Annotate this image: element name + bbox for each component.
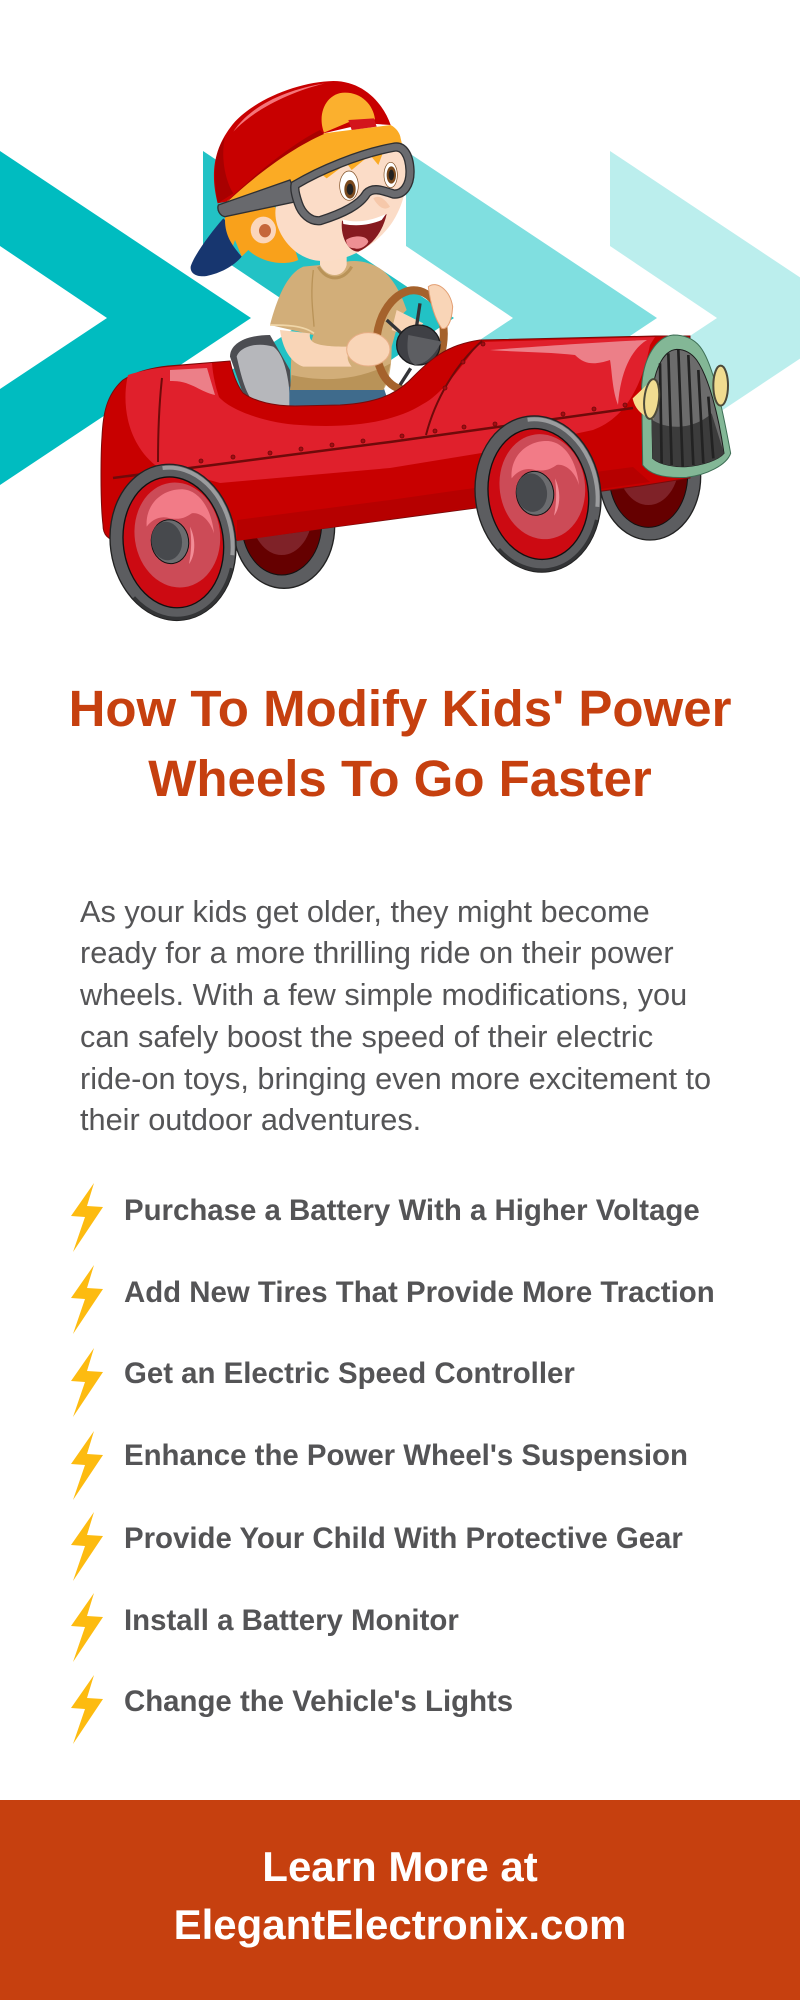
- front wheel: [465, 408, 611, 580]
- footer call to action: [0, 1800, 800, 2000]
- icon: lightning bolt 1: [71, 1183, 103, 1252]
- title: [69, 680, 731, 807]
- intro paragraph: their outdoor adventures.: [80, 1102, 421, 1137]
- icon: lightning bolt 2: [71, 1265, 103, 1334]
- rear wheels: [233, 413, 701, 588]
- boy torso, seat and steering wheel: [230, 257, 453, 407]
- tip 7: Change the Vehicle's Lights: [124, 1685, 513, 1718]
- icon: lightning bolt 7: [71, 1675, 103, 1744]
- footer call to action: Learn More at: [262, 1843, 538, 1890]
- intro paragraph: can safely boost the speed of their electric: [80, 1019, 653, 1054]
- icon: lightning bolt 6: [71, 1593, 103, 1662]
- tip 2: Add New Tires That Provide More Traction: [124, 1276, 715, 1309]
- icon: lightning bolt 4: [71, 1431, 103, 1500]
- tip 6: Install a Battery Monitor: [124, 1604, 459, 1637]
- tip 1: Purchase a Battery With a Higher Voltage: [124, 1194, 700, 1227]
- rear-left front wheel: [100, 456, 246, 629]
- chevron arrows background: [0, 151, 800, 485]
- boy head with cap and goggles: [191, 81, 410, 276]
- intro paragraph: ready for a more thrilling ride on their power: [80, 935, 674, 970]
- title: How To Modify Kids' Power: [69, 680, 731, 737]
- icon: lightning bolt 3: [71, 1348, 103, 1417]
- intro paragraph: wheels. With a few simple modifications, you: [80, 977, 687, 1012]
- icon: lightning bolt 5: [71, 1512, 103, 1581]
- grille and headlights: [633, 335, 731, 478]
- title: Wheels To Go Faster: [148, 750, 652, 807]
- tip 5: Provide Your Child With Protective Gear: [124, 1522, 683, 1555]
- tip 4: Enhance the Power Wheel's Suspension: [124, 1439, 688, 1472]
- tip 3: Get an Electric Speed Controller: [124, 1357, 575, 1390]
- tips list: [71, 1183, 715, 1744]
- intro paragraph: [80, 894, 711, 1137]
- footer call to action: ElegantElectronix.com: [174, 1901, 626, 1948]
- illustration: kid driving red car over chevrons: [0, 81, 800, 622]
- intro paragraph: As your kids get older, they might become: [80, 894, 650, 928]
- intro paragraph: ride-on toys, bringing even more excitement to: [80, 1061, 711, 1096]
- car body: [101, 336, 690, 541]
